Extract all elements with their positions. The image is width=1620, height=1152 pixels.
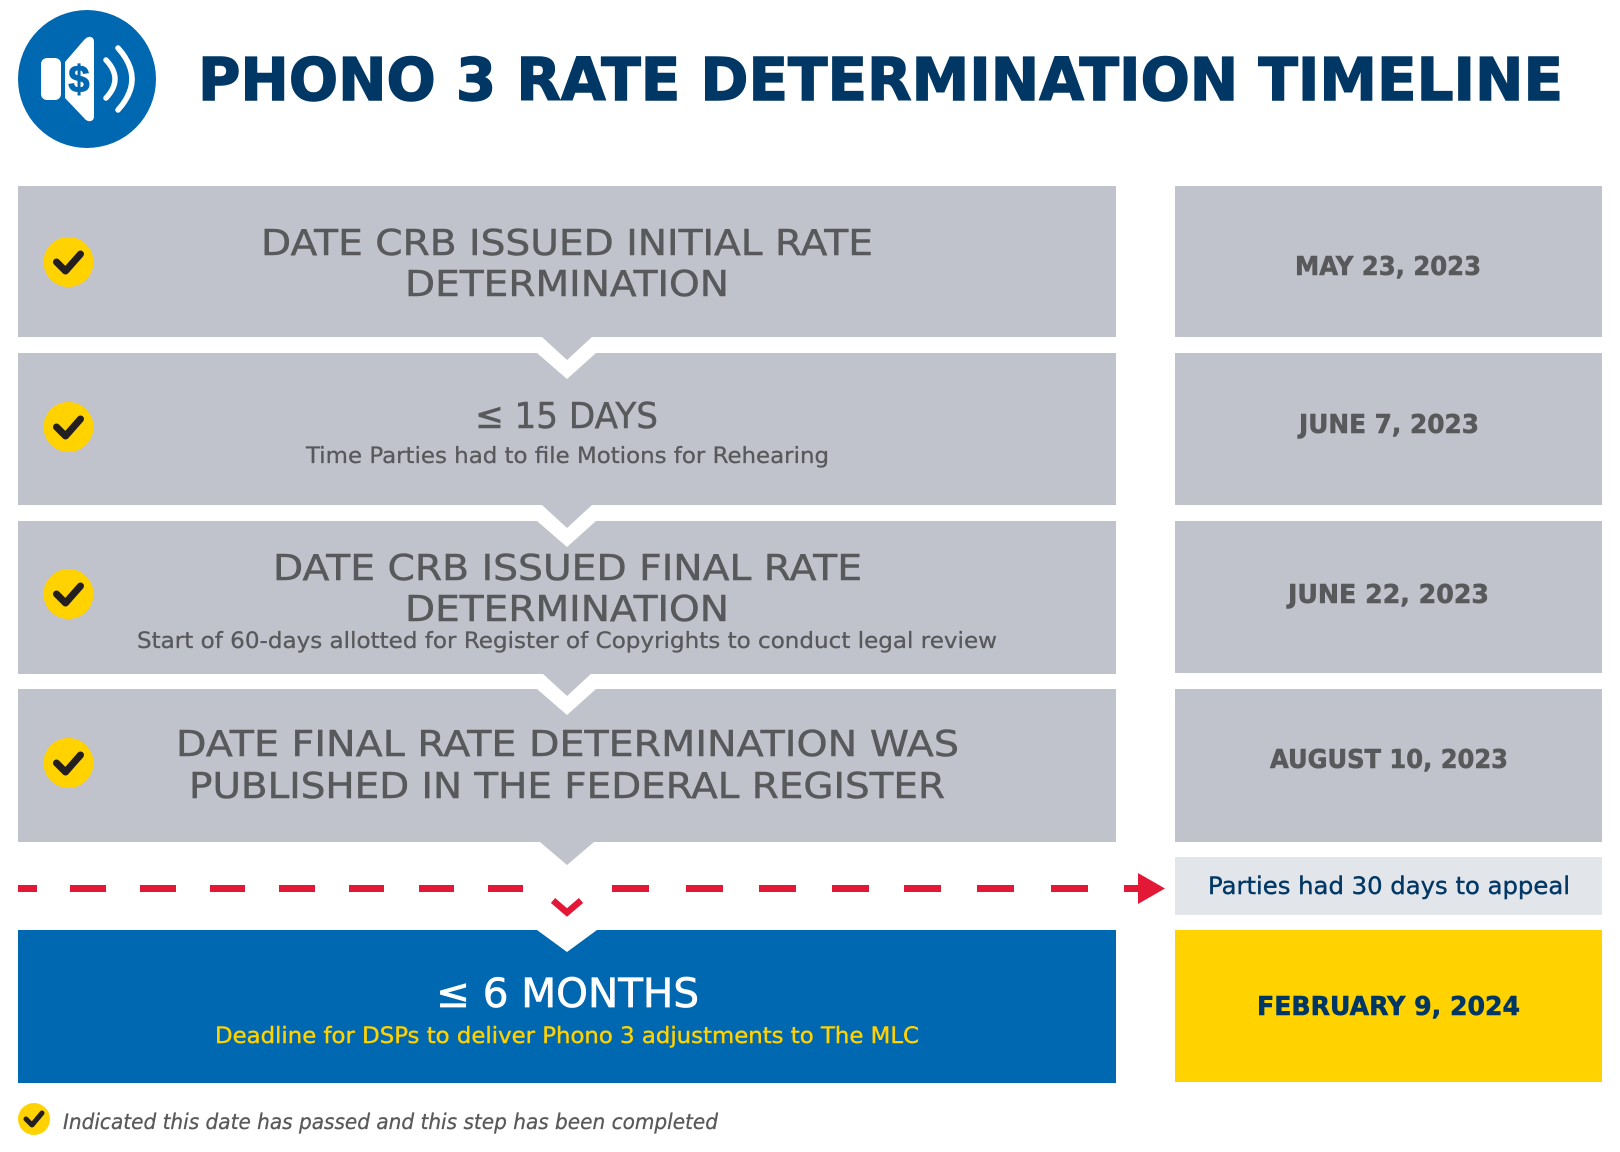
step 2 heading: ≤ 15 DAYS: [475, 396, 658, 437]
callout: thirty days to appeal: Parties had 30 days to appeal: [1208, 872, 1570, 900]
step 3 heading: [273, 548, 862, 630]
step 4 heading: DATE FINAL RATE DETERMINATION WAS: [176, 724, 959, 765]
panel: step 3 final rate determination: [18, 521, 1116, 674]
icon: speaker with dollar sign: [18, 10, 156, 148]
icon: speaker with dollar sign: $: [68, 59, 90, 101]
step 1 heading: DETERMINATION: [405, 264, 729, 305]
icon: step 2 check: [44, 402, 94, 452]
icon: step 4 check: [44, 738, 94, 788]
arrow: red chevron: [553, 900, 581, 912]
panel: step 3 date: [1175, 521, 1602, 673]
callout: thirty days to appeal: [1175, 857, 1602, 915]
panel: step 3 date: JUNE 22, 2023: [1286, 580, 1489, 610]
arrow: step 2 to 3: [537, 505, 596, 547]
panel: step 4 date: AUGUST 10, 2023: [1270, 745, 1508, 775]
panel: step 1 date: MAY 23, 2023: [1295, 252, 1481, 282]
icon: step 3 check: [44, 569, 94, 619]
step 1 heading: DATE CRB ISSUED INITIAL RATE: [261, 223, 873, 264]
panel: step 2 date: JUNE 7, 2023: [1297, 410, 1479, 440]
icon: step 1 check: [44, 237, 94, 287]
panel: six months deadline: [18, 930, 1116, 1083]
arrow: step 1 to 2: [537, 337, 596, 379]
step 4 heading: [176, 724, 959, 807]
step 3 description: Start of 60-days allotted for Register of Copyrights to conduct legal review: [137, 629, 997, 654]
title: PHONO 3 RATE DETERMINATION TIMELINE: [198, 45, 1563, 114]
panel: february date: FEBRUARY 9, 2024: [1257, 992, 1520, 1022]
panel: step 1 initial rate determination: [18, 186, 1116, 337]
legend: completed step key: [18, 1103, 719, 1135]
step 3 heading: DETERMINATION: [405, 589, 729, 630]
panel: step 1 date: [1175, 186, 1602, 337]
legend: completed step key: Indicated this date has passed and this step has been completed: [63, 1110, 719, 1134]
arrow: step 4 pointer: [540, 842, 594, 865]
six months description: Deadline for DSPs to deliver Phono 3 adjustments to The MLC: [215, 1024, 919, 1049]
arrow: notch into deadline panel: [537, 930, 597, 952]
panel: step 4 federal register publication: [18, 689, 1116, 842]
panel: step 4 date: [1175, 689, 1602, 842]
panel: step 2 fifteen days: [18, 353, 1116, 505]
step 2 description: Time Parties had to file Motions for Rehearing: [305, 444, 829, 469]
step 3 heading: DATE CRB ISSUED FINAL RATE: [273, 548, 862, 589]
step 4 heading: PUBLISHED IN THE FEDERAL REGISTER: [189, 766, 945, 807]
panel: step 2 date: [1175, 353, 1602, 505]
arrow: red dashed line to appeal note: [18, 873, 1165, 904]
arrow: step 3 to 4: [537, 673, 596, 715]
six months heading: ≤ 6 MONTHS: [436, 971, 699, 1017]
step 1 heading: [261, 223, 873, 305]
panel: february date: [1175, 930, 1602, 1082]
